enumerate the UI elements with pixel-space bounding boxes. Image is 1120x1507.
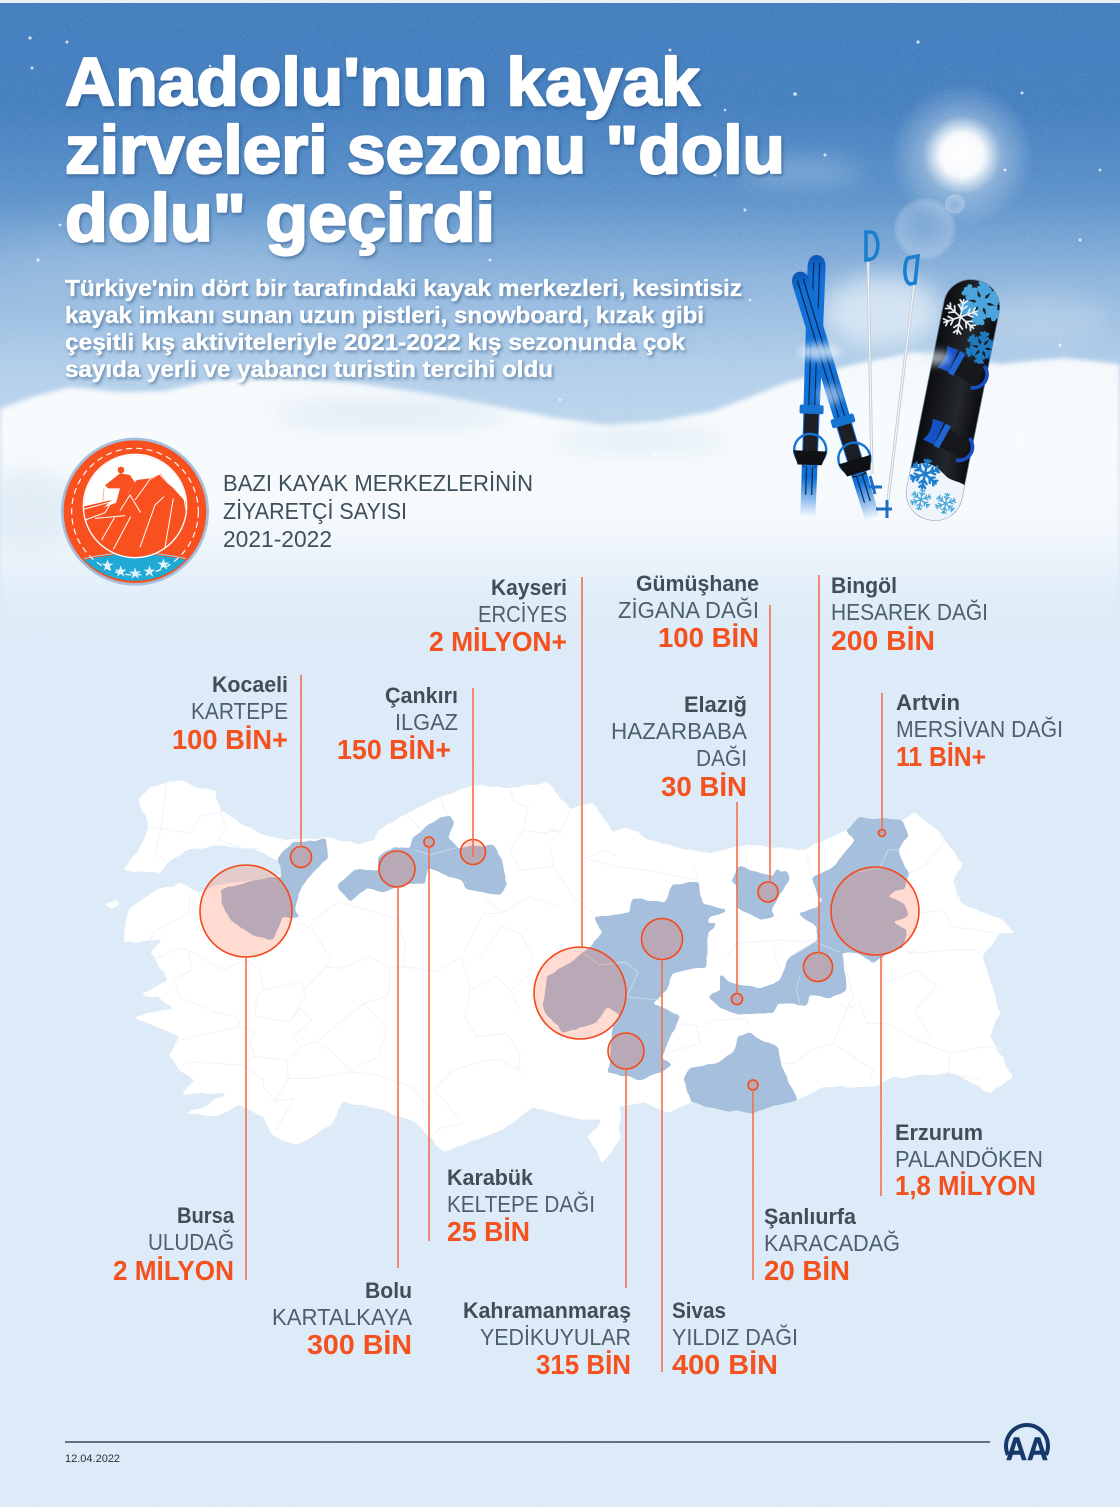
label: Elazığ: 30 BİN (661, 771, 747, 802)
label: Sivas: 400 BİN (672, 1349, 778, 1380)
icon: skier badge: ★ (156, 557, 170, 574)
title: Anadolu'nun kayak (65, 44, 700, 120)
intro text: çeşitli kış aktiviteleriyle 2021-2022 kış sezonunda çok (65, 329, 686, 355)
label: Kahramanmaraş: Kahramanmaraş (463, 1298, 631, 1323)
label: Kayseri (429, 575, 567, 657)
icon: skier badge (62, 439, 208, 584)
label: Çankırı: ILGAZ (395, 709, 458, 735)
heading: chart title: BAZI KAYAK MERKEZLERİNİN (223, 470, 533, 496)
heading: chart title: ZİYARETÇİ SAYISI (223, 498, 407, 524)
label: Kahramanmaraş: 315 BİN (536, 1349, 631, 1380)
label: Şanlıurfa: 20 BİN (764, 1255, 850, 1286)
label: Bursa (113, 1203, 235, 1286)
label: Çankırı (337, 683, 458, 765)
label: Elazığ: DAĞI (696, 745, 747, 771)
label: Bingöl (831, 573, 988, 656)
label: Erzurum: Erzurum (895, 1120, 983, 1145)
icon: ski poles (866, 232, 918, 518)
label: Elazığ (611, 692, 748, 802)
intro text: kayak imkanı sunan uzun pistleri, snowboard, kızak gibi (65, 302, 704, 328)
icon: AA logo: AA (1006, 1431, 1048, 1467)
icon: skier badge: ★ (128, 566, 142, 583)
label: Bursa: ULUDAĞ (148, 1229, 234, 1255)
map: base land (105, 780, 1015, 1163)
label: Erzurum: PALANDÖKEN (895, 1146, 1043, 1172)
label: Karabük: KELTEPE DAĞI (447, 1191, 595, 1217)
label: Bolu (272, 1278, 413, 1360)
icon: skier badge: ★ (114, 563, 128, 580)
intro text: sayıda yerli ve yabancı turistin tercihi oldu (65, 356, 553, 382)
label: Karabük (447, 1165, 595, 1247)
label: Sivas: YILDIZ DAĞI (672, 1324, 798, 1350)
sun and lens flare (890, 83, 1034, 260)
label: Karabük: Karabük (447, 1165, 534, 1190)
label: Sivas: Sivas (672, 1298, 726, 1323)
label: Bingöl: 200 BİN (831, 625, 935, 656)
label: Bolu: 300 BİN (307, 1329, 412, 1360)
icon: skier badge: ★ (100, 557, 114, 574)
label: Gümüşhane: 100 BİN (658, 622, 759, 653)
heading: chart title: 2021-2022 (223, 526, 332, 552)
label: Kahramanmaraş (463, 1298, 631, 1380)
label: Artvin: 11 BİN+ (896, 741, 986, 772)
heading: chart title (223, 470, 533, 552)
intro text (65, 275, 742, 382)
label: Kayseri: ERCİYES (478, 601, 567, 627)
title (65, 44, 785, 256)
map: highlighted provinces (220, 815, 909, 1113)
label: Elazığ: HAZARBABA (611, 718, 748, 744)
label: Erzurum (895, 1120, 1043, 1201)
label: Bolu: KARTALKAYA (272, 1304, 413, 1330)
label: Gümüşhane: ZİGANA DAĞI (618, 597, 759, 623)
label: Kocaeli: Kocaeli (212, 672, 288, 697)
label: Elazığ: Elazığ (684, 692, 747, 717)
label: Bursa: 2 MİLYON (113, 1255, 234, 1286)
label: Karabük: 25 BİN (447, 1216, 530, 1247)
label: Artvin: MERSİVAN DAĞI (896, 716, 1063, 742)
title: zirveleri sezonu "dolu (65, 112, 785, 188)
leader lines (246, 575, 882, 1372)
icon: skier badge: ★ (142, 563, 156, 580)
label: Gümüşhane (618, 571, 759, 653)
label: Çankırı: Çankırı (385, 683, 458, 708)
label: Şanlıurfa: KARACADAĞ (764, 1230, 900, 1256)
label: Kayseri: Kayseri (491, 575, 567, 600)
map of Turkey (105, 780, 1015, 1163)
label: Kocaeli: KARTEPE (191, 698, 288, 724)
label: Bingöl: HESAREK DAĞI (831, 599, 988, 625)
label: Artvin: Artvin (896, 690, 960, 715)
label: Kocaeli (172, 672, 288, 755)
label: Şanlıurfa (764, 1204, 900, 1286)
illustration: ski equipment (792, 230, 1000, 521)
label: Gümüşhane: Gümüşhane (636, 571, 759, 596)
title: dolu" geçirdi (65, 180, 495, 256)
map: province borders (150, 783, 560, 1133)
icon: skis (782, 254, 889, 524)
label: Sivas (672, 1298, 798, 1380)
falling snow dots (28, 36, 1101, 456)
label: Artvin (896, 690, 1063, 772)
map: circles (200, 830, 919, 1090)
label: Bolu: Bolu (365, 1278, 412, 1303)
label: Kayseri: 2 MİLYON+ (429, 626, 567, 657)
label: Kahramanmaraş: YEDİKUYULAR (480, 1324, 631, 1350)
label: Bursa: Bursa (177, 1203, 235, 1228)
label: Şanlıurfa: Şanlıurfa (764, 1204, 857, 1229)
intro text: Türkiye'nin dört bir tarafındaki kayak merkezleri, kesintisiz (65, 275, 742, 301)
footer rule and date: 12.04.2022 (65, 1453, 120, 1465)
label: Bingöl: Bingöl (831, 573, 897, 598)
label: Kocaeli: 100 BİN+ (172, 724, 288, 755)
label: Çankırı: 150 BİN+ (337, 734, 451, 765)
label: Erzurum: 1,8 MİLYON (895, 1170, 1036, 1201)
icon: snowboard (906, 279, 1000, 521)
